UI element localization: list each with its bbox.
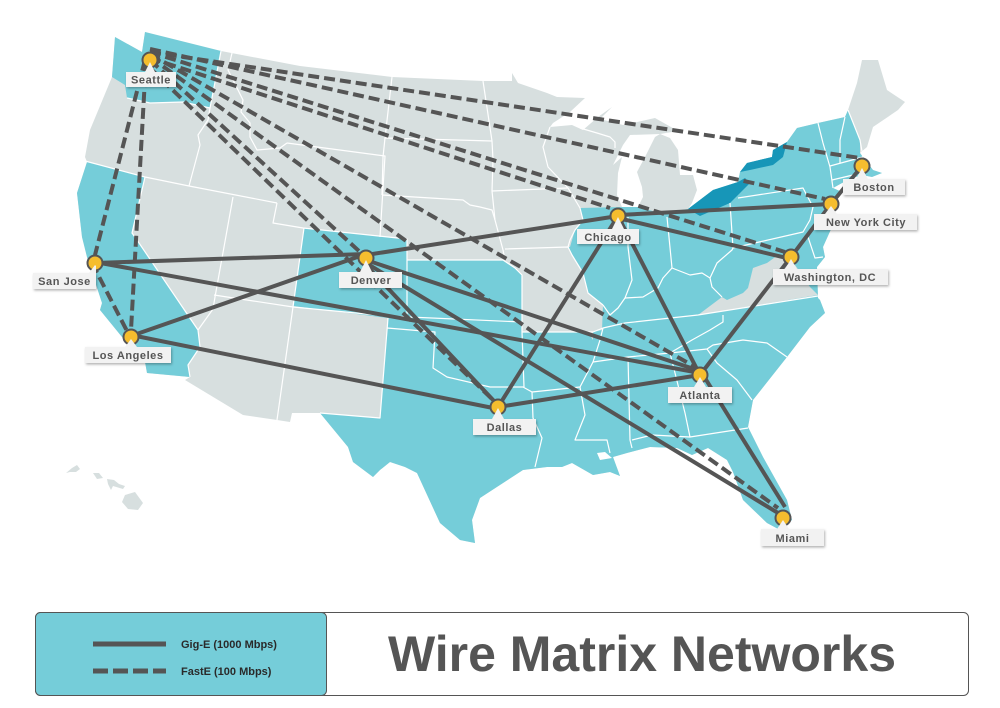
city node: Los Angeles <box>85 330 171 363</box>
city node: Dallas: Dallas <box>487 422 522 434</box>
lake: Pontchartrain <box>597 452 612 460</box>
city node: Atlanta: Atlanta <box>679 390 721 402</box>
city node: Chicago: Chicago <box>584 232 632 244</box>
legend swatch: Gig-E solid line <box>93 642 166 646</box>
city node: Seattle: Seattle <box>131 74 171 86</box>
city node: San Jose <box>33 256 102 289</box>
states: highlighted Washington <box>112 32 221 108</box>
city node: Atlanta <box>668 368 732 403</box>
network links: FastE dashed <box>92 49 860 508</box>
city node: Denver <box>339 250 402 288</box>
land: all states base <box>77 32 905 543</box>
city node: Denver: Denver <box>351 275 391 287</box>
legend panel <box>36 612 326 696</box>
legend swatch: FastE dashed line <box>93 668 166 674</box>
city node: Washington, DC <box>773 250 888 285</box>
state boundary lines <box>85 51 863 467</box>
title: Wire Matrix Networks <box>388 626 896 682</box>
legend label: FastE: FastE (100 Mbps) <box>181 666 272 678</box>
city node: New York City <box>814 196 917 230</box>
islands: Hawaii <box>66 465 143 510</box>
city node: Seattle <box>126 52 176 87</box>
city node: San Jose: San Jose <box>38 276 91 288</box>
map: United States <box>66 32 905 543</box>
network links: Gig-E solid <box>95 166 862 516</box>
city node: Los Angeles: Los Angeles <box>92 350 164 362</box>
footer panel <box>36 612 968 696</box>
states: highlighted central, southern and eastern region <box>293 110 882 543</box>
city node: New York City: New York City <box>826 217 906 229</box>
city node: Miami <box>761 510 824 546</box>
city node: Dallas <box>473 400 536 435</box>
lake: Michigan <box>613 134 660 207</box>
states: Missouri in grey <box>503 247 603 340</box>
states: Virginia in grey <box>698 255 818 315</box>
lake: Ontario <box>740 142 787 172</box>
city node: Boston: Boston <box>853 182 895 194</box>
legend label: Gig-E: Gig-E (1000 Mbps) <box>181 639 277 651</box>
lake: Erie <box>688 178 750 216</box>
city node: Washington, DC: Washington, DC <box>784 272 876 284</box>
city node: Miami: Miami <box>776 533 809 545</box>
states: highlighted California <box>77 161 200 377</box>
city node: Boston <box>843 158 905 195</box>
city node: Chicago <box>577 208 639 244</box>
legend background <box>36 612 326 696</box>
footer frame <box>36 612 968 696</box>
